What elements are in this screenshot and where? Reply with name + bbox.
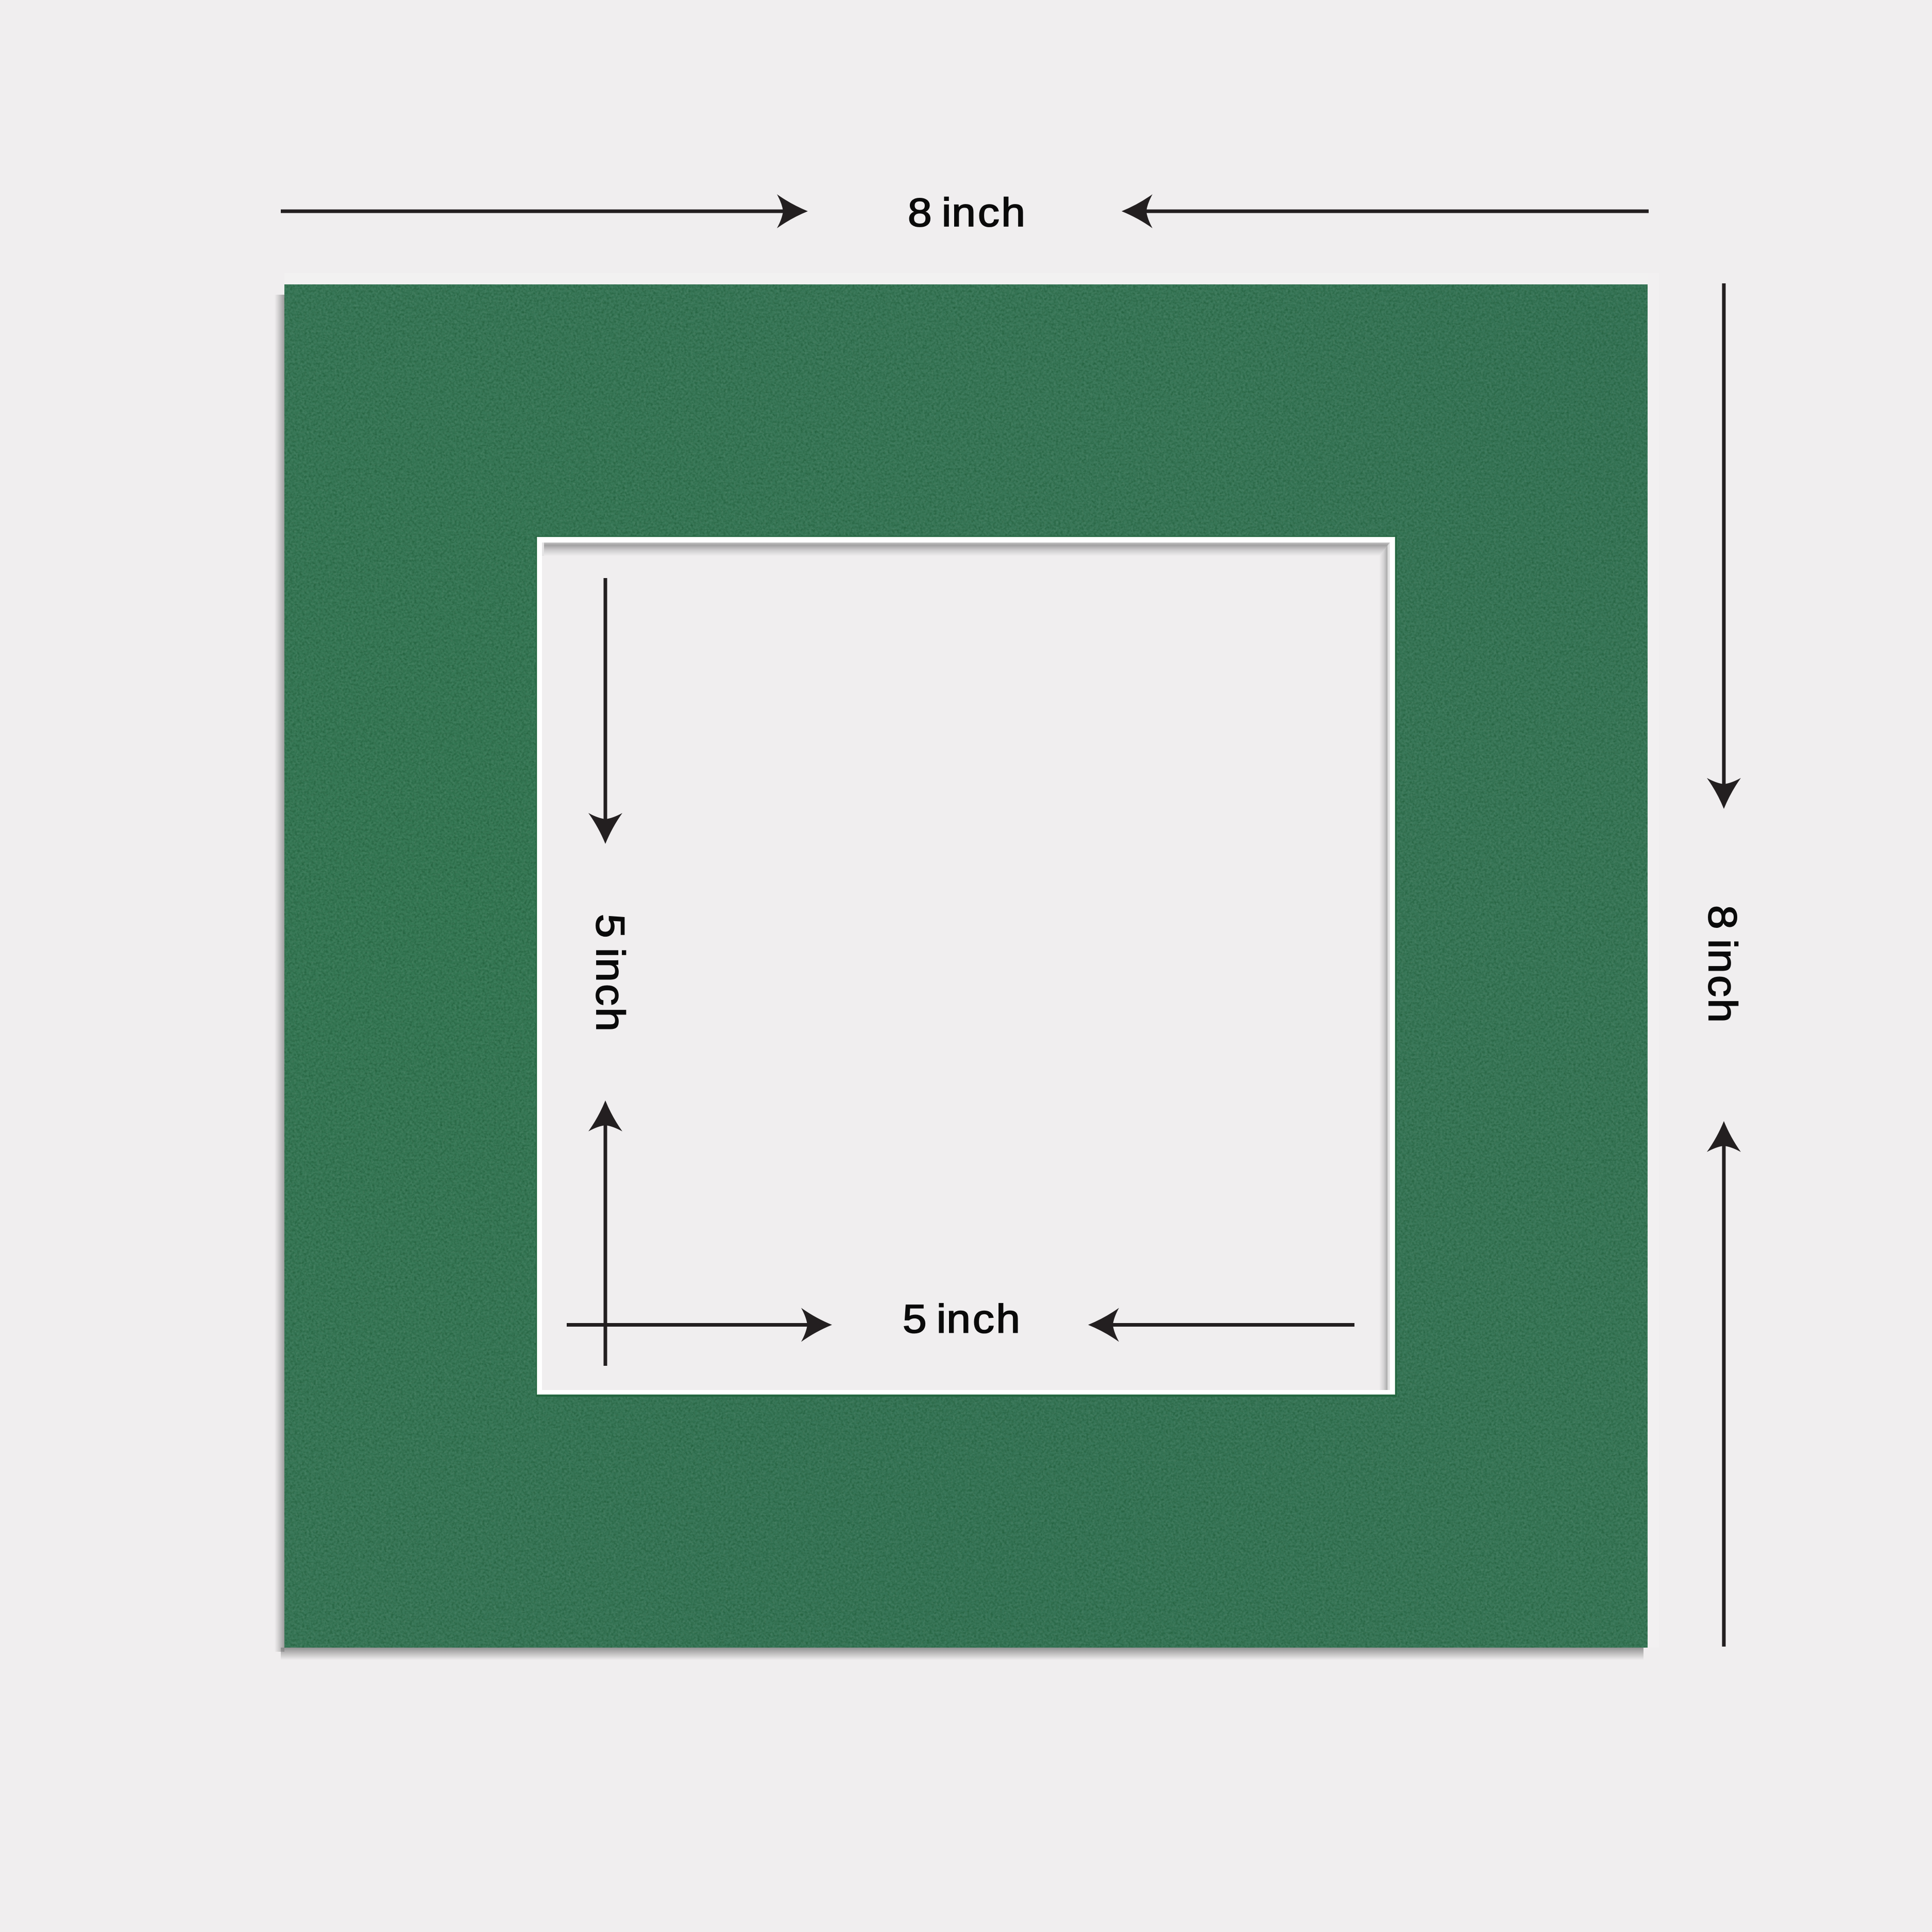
arrow: inner width, right segment	[1088, 1308, 1354, 1342]
arrow: top width, right segment	[1122, 194, 1649, 228]
window opening	[536, 536, 1397, 1397]
mat outer shadow and halo	[275, 273, 1659, 1660]
label: inner bottom 5 inch: 5 inch	[903, 1297, 1020, 1342]
arrow: inner width, left segment	[567, 1308, 832, 1342]
arrow: top width, left segment	[281, 194, 808, 228]
mat board surface	[284, 284, 1648, 1648]
arrow: right height, bottom segment	[1707, 1121, 1741, 1647]
arrow: inner height, top segment	[588, 578, 622, 844]
arrow: inner height, bottom segment	[588, 1100, 622, 1366]
label: right 8 inch: 8 inch	[1700, 905, 1744, 1023]
label: top 8 inch: 8 inch	[908, 191, 1025, 235]
label: inner left 5 inch: 5 inch	[588, 914, 632, 1031]
arrow: right height, top segment	[1707, 283, 1741, 809]
panel: green mat board	[275, 273, 1659, 1660]
